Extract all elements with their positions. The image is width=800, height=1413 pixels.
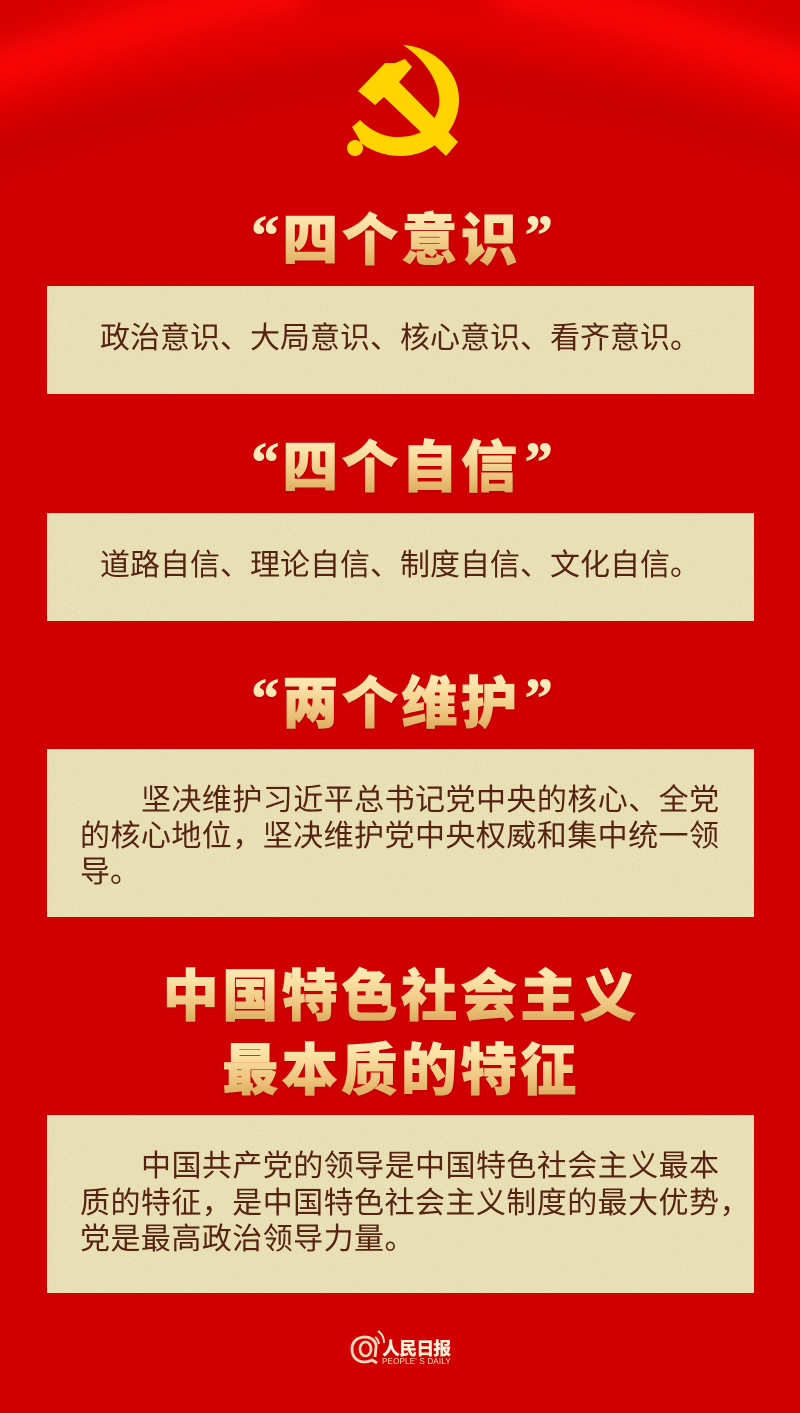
icon: at sign with signal: [350, 1330, 385, 1364]
logo wordmark: 人民日报: [382, 1335, 450, 1361]
text: [80, 1141, 750, 1258]
heading: two upholds: 两个维护: [282, 659, 521, 740]
heading: four confidences: ”: [525, 432, 553, 494]
panel: four consciousnesses: [47, 286, 754, 394]
heading: four confidences: “: [251, 432, 279, 494]
panel: two upholds: [47, 749, 754, 917]
heading: four confidences: 四个自信: [282, 423, 521, 504]
icon: hammer and sickle emblem: [347, 45, 459, 156]
heading: four consciousnesses: “: [251, 205, 279, 267]
text: 质的特征，是中国特色社会主义制度的最大优势，: [80, 1178, 750, 1222]
text: 政治意识、大局意识、核心意识、看齐意识。: [100, 313, 700, 357]
text: 坚决维护习近平总书记党中央的核心、全党: [141, 775, 720, 819]
heading: four consciousnesses: 四个意识: [282, 196, 521, 277]
text: 导。: [80, 847, 140, 891]
heading: four consciousnesses: ”: [525, 205, 553, 267]
text: 的核心地位，坚决维护党中央权威和集中统一领: [80, 811, 719, 855]
logo English name: PEOPLE' S DAILY: [382, 1357, 451, 1366]
text: 道路自信、理论自信、制度自信、文化自信。: [100, 540, 700, 584]
heading: two upholds: ”: [525, 668, 553, 730]
panel: defining feature: [47, 1115, 754, 1293]
text: [80, 775, 720, 891]
text: 党是最高政治领导力量。: [80, 1214, 415, 1258]
heading: two upholds: “: [251, 668, 279, 730]
text: 中国共产党的领导是中国特色社会主义最本: [141, 1141, 720, 1185]
logo: People's Daily: [350, 1330, 451, 1366]
heading: defining feature: 最本质的特征: [222, 1026, 580, 1107]
heading: defining feature: [163, 952, 639, 1107]
panel: four confidences: [47, 513, 754, 621]
heading: defining feature: 中国特色社会主义: [163, 952, 639, 1033]
